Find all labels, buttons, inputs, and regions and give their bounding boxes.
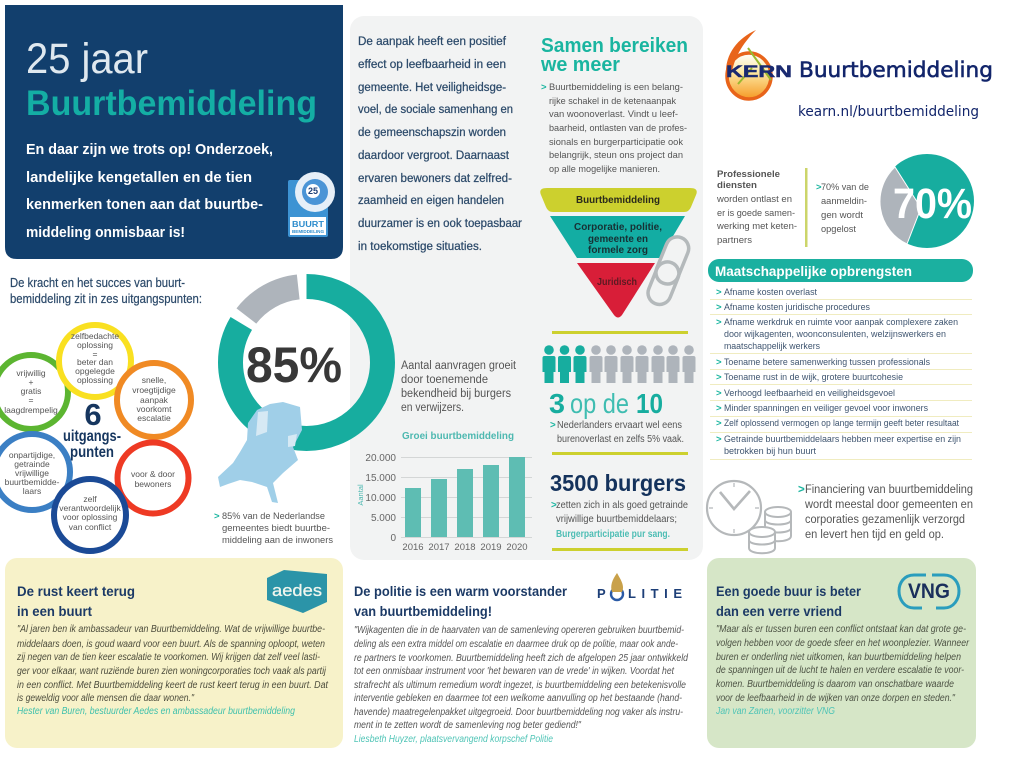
quote: "Al jaren ben ik ambassadeur van Buurtbemiddeling. Wat de vrijwillige buurtbe- [17,624,326,635]
circle: zelf verantwoordelijk [54,479,126,551]
panel: grey centre background [350,16,703,560]
stat: 3 op de 10: 10 [636,388,663,419]
text: positive effect: voel, de sociale samenhang en [358,102,513,116]
list: opbrengsten: maatschappelijk werkers [724,341,820,352]
label: 6 uitgangspunten: 6 [84,397,102,432]
circle: zelf verantwoordelijk: verantwoordelijk [59,503,121,513]
quote: tot een onmisbaar instrument voor 'het bewaren van de vrede' in wijken. Voordat het [354,666,675,677]
circle: zelf verantwoordelijk: zelf [83,494,97,504]
quote: Liesbeth Huyzer, plaatsvervangend korpschef Politie [354,734,554,745]
quote: voor de leefbaarheid in de wijken van onze dorpen en steden." [716,693,955,704]
text: 70% opgelost: aanmeldin- [821,196,867,207]
intro text: kenmerken tonen aan dat buurtbe- [26,196,263,213]
list: opbrengsten: > [716,372,722,383]
heading: in een buurt [17,604,92,619]
text: 70% opgelost: > [816,182,822,193]
circle: onpartijdige vrijwilligers: onpartijdige, [9,450,55,460]
chart: escalation funnel: Corporatie, politie, [574,221,662,233]
text: 85% van de gemeentes: middeling aan de inwoners [222,535,333,546]
quote: zij negen van de tien keer escalatie te voorkomen. Wij krijgen dat zelf veel lasti- [16,652,321,663]
list: opbrengsten: betrokken bij hun buurt [724,446,816,457]
logo: VNG [899,575,959,608]
chart: groei buurtbemiddeling [356,430,532,553]
text: financiering [798,484,973,541]
logo: KERN Buurtbemiddeling: Buurtbemiddeling [799,58,993,82]
chart: groei buurtbemiddeling: 10.000 [365,493,396,504]
text: 70% opgelost: opgelost [821,224,856,235]
chart: groei buurtbemiddeling: Groei buurtbemiddeling [402,430,514,442]
panel: VNG quote [707,558,976,748]
text: professionele diensten: diensten [717,180,757,191]
chart: escalation funnel: gemeente en [588,233,648,245]
list: opbrengsten: > [716,403,722,414]
stat: 3 op de 10 [549,388,663,419]
chart: groei buurtbemiddeling: 15.000 [365,473,396,484]
icon: anniversary badge: 25 [308,186,318,196]
text: professionele diensten: partners [717,235,752,246]
circle: onpartijdige vrijwilligers: getrainde [14,459,50,469]
heading: De rust keert terug [17,584,135,599]
heading: Een goede buur is beter [716,584,862,599]
text: professionele diensten: werking met keten- [716,221,797,232]
quote [16,624,329,717]
heading: Samen bereiken we meer: we meer [540,53,620,76]
circle: zelfbedachte oplossing [59,325,131,397]
heading: De politie is een warm voorstander [354,584,568,599]
quote: "Wijkagenten die in de haarvaten van de samenleving opereren gebruiken buurtbemid- [354,625,685,636]
quote: ger voor elkaar, want ruziënde buren zien woningcorporaties toch vaak als partij [17,666,327,677]
circle: vrijwillig [0,355,68,429]
text: financiering: Financiering van buurtbemiddeling [805,484,973,496]
chart: groei buurtbemiddeling: 5.000 [371,513,396,524]
text: professionele diensten: er is goede samen- [717,208,795,219]
heading: van buurtbemiddeling! [354,604,492,619]
text: positive effect: de gemeenschapszin worden [358,125,506,139]
circle: zelfbedachte oplossing: oplossing [77,340,113,350]
quote: buren er onderling niet uitkomen, kan buurtbemiddeling helpen [716,652,961,663]
icon: map of the Netherlands [218,402,302,503]
text: vrijwillige bemiddelaars: zetten zich in als goed getrainde [556,500,689,511]
heading: Samen bereiken we meer: Samen bereiken [541,34,688,57]
text: schakel in de ketenaanpak: belangrijk, steun ons project dan [549,150,683,161]
list: opbrengsten: > [716,418,722,429]
circle: zelfbedachte oplossing: oplossing [77,375,113,385]
icon: ten people [542,345,696,383]
text: positive effect: duurzamer is en ook toepasbaar [358,216,522,230]
quote: de spanningen uit de lucht te halen en verdere escalatie te voor- [716,665,965,676]
circle: onpartijdige vrijwilligers [0,434,70,510]
text: vrijwillige bemiddelaars: vrijwillige buurtbemiddelaars; [556,514,677,525]
logo: KERN Buurtbemiddeling: KERN [726,62,792,81]
circle: snelle aanpak: vroegtijdige [132,385,176,395]
circle: onpartijdige vrijwilligers: vrijwillige [15,468,49,478]
quote: komen. Buurtbemiddeling is daarom van onschatbare waarde [716,679,955,690]
icon: anniversary badge: BEMIDDELING [292,229,325,234]
chart: 70% pie: 70% [893,180,972,228]
quote [715,624,970,717]
text: 85% van de gemeentes: 85% van de Nederlandse [222,511,325,522]
label: 6 uitgangspunten: uitgangs- [63,428,121,445]
list: opbrengsten [716,287,961,457]
label: 6 uitgangspunten: punten [70,444,114,461]
circle: onpartijdige vrijwilligers: buurtbemidde- [5,477,60,487]
text: positive effect: zaamheid en eigen handelen [358,193,504,207]
circle: vrijwillig: laagdrempelig [4,405,58,415]
heading [17,584,135,619]
circle: onpartijdige vrijwilligers: laars [23,486,41,496]
text: schakel in de ketenaanpak: van woonoverlast. Vindt u leef- [549,109,678,120]
panel: maatschappelijke opbrengsten [708,259,973,460]
list: opbrengsten: > [716,357,722,368]
text: professionele diensten [716,169,797,246]
list: opbrengsten: > [716,302,722,313]
quote: interventie gebleken en daarmee tot een welkome aanvulling op het bestaande (hand- [354,693,683,704]
circle: snelle aanpak: escalatie [137,413,171,423]
icon: anniversary badge: BUURT [292,220,324,229]
text: 85% van de gemeentes [214,511,333,546]
chart: groei buurtbemiddeling: 20.000 [365,453,396,464]
heading: Buurtbemiddeling: Buurtbemiddeling [26,84,317,123]
text: kracht en succes: bemiddeling zit in zes uitgangspunten: [10,292,202,306]
text: aantal aanvragen: bekendheid bij burgers [401,388,511,400]
text: schakel in de ketenaanpak: sionals en burgerparticipatie ook [549,137,683,148]
stat: 3 op de 10: 3 [549,388,565,419]
list: opbrengsten: Toename betere samenwerking tussen professionals [724,357,930,368]
list: opbrengsten: Minder spanningen en veiliger gevoel voor inwoners [724,403,928,414]
circle: voor en door bewoners [118,442,188,514]
text: schakel in de ketenaanpak: baarheid, ontlasten van de profes- [549,123,687,134]
icon: anniversary badge [288,172,335,237]
quote: re partners te voorkomen. Buurtbemiddeling heeft zich de afgelopen 25 jaar ontwikkeld [354,653,689,664]
chart: escalation funnel [540,188,697,318]
list: opbrengsten: Afname kosten juridische procedures [724,302,870,313]
icon: chain [645,233,692,308]
diagram: six principles [0,325,191,551]
logo: Aedes [267,570,327,613]
circle: vrijwillig: vrijwillig [16,368,46,378]
text: positive effect: gemeente. Het veiligheidsge- [358,80,506,94]
text: positive effect: ervaren bewoners dat zelfred- [358,171,512,185]
text: schakel in de ketenaanpak: rijke schakel in de ketenaanpak [549,96,676,107]
text: schakel in de ketenaanpak: Buurtbemiddeling is een belang- [549,82,683,93]
logo: KERN Buurtbemiddeling [726,30,993,120]
icon: coins [749,507,791,553]
text: schakel in de ketenaanpak: > [541,82,547,93]
heading [716,584,862,619]
text: burenoverlast [550,420,684,445]
text: burenoverlast: burenoverlast en zelfs 5% vaak. [557,434,684,445]
circle: zelfbedachte oplossing: opgelegde [75,366,115,376]
circle: zelf verantwoordelijk: voor oplossing [63,512,118,522]
chart: groei buurtbemiddeling: 2016 [402,542,424,553]
intro text [26,141,273,241]
stat: 3 op de 10: op de [570,388,629,419]
text: 70% opgelost: gen wordt [821,210,863,221]
circle: zelfbedachte oplossing: = [93,349,98,359]
text: financiering: > [798,484,805,496]
chart: escalation funnel: formele zorg [588,244,648,256]
quote: is geweldig voor alle mensen die daar wonen." [17,693,194,704]
chart: 85% donut: 85% [246,337,342,393]
logo: Aedes: aedes [272,581,322,600]
text: vrijwillige bemiddelaars: > [551,500,557,511]
heading [354,584,568,619]
circle: snelle aanpak: snelle, [142,375,166,385]
logo: Politie: P [597,586,606,601]
stat: 3500 burgers: 3500 burgers [550,470,686,496]
circle: snelle aanpak [117,363,191,437]
list: opbrengsten: Afname werkdruk en ruimte voor aanpak complexere zaken [724,317,958,328]
panel: Politie quote [354,573,689,745]
chart: groei buurtbemiddeling: 2019 [480,542,502,553]
list: opbrengsten: > [716,317,722,328]
chart: groei buurtbemiddeling: 2017 [428,542,450,553]
list: opbrengsten: > [716,388,722,399]
text: professionele diensten: worden ontlast en [716,194,792,205]
chart: groei buurtbemiddeling: 2018 [454,542,476,553]
circle: voor en door bewoners: voor & door [131,469,175,479]
panel: title [5,5,343,259]
text: positive effect: De aanpak heeft een positief [358,34,507,48]
text: burenoverlast: > [550,420,556,431]
circle: vrijwillig: + [29,377,34,387]
quote: Jan van Zanen, voorzitter VNG [715,706,835,717]
text: 70% opgelost: 70% van de [821,182,869,193]
icon: clock [707,481,761,535]
text: schakel in de ketenaanpak [541,82,687,175]
text: kracht en succes [10,276,202,306]
circle: snelle aanpak: aanpak [140,395,169,405]
list: opbrengsten: door wijkagenten, woonconsulenten, welzijnswerkers en [724,329,946,340]
text: 85% van de gemeentes: gemeentes biedt buurtbe- [222,523,330,534]
list: opbrengsten: Afname kosten overlast [724,287,817,298]
quote: ment in te zetten wordt de samenleving nog beter gediend!" [354,720,581,731]
text: schakel in de ketenaanpak: op alle mogelijke manieren. [549,164,660,175]
text: kracht en succes: De kracht en het succes van buurt- [10,276,185,290]
quote [354,625,689,745]
logo: Politie [597,573,682,601]
circle: zelfbedachte oplossing: beter dan [77,357,113,367]
chart: groei buurtbemiddeling: 2020 [506,542,528,553]
text: vrijwillige bemiddelaars [551,500,689,540]
circle: zelf verantwoordelijk: van conflict [69,522,112,532]
text: positive effect: in toekomstige situaties. [358,239,482,253]
text: positive effect: daardoor vergroot. Daarnaast [358,148,510,162]
text: vrijwillige bemiddelaars: Burgerparticipatie pur sang. [556,529,670,540]
quote: "Maar als er tussen buren een conflict ontstaat kan dat grote ge- [716,624,967,635]
text: 85% van de gemeentes: > [214,511,220,522]
chart: escalation funnel: Buurtbemiddeling [576,195,660,206]
circle: voor en door bewoners: bewoners [135,479,171,489]
text: financiering: wordt meestal door gemeenten en [804,499,973,511]
circle: vrijwillig: gratis [21,386,41,396]
chart: groei buurtbemiddeling: 0 [390,533,396,544]
chart: 70% pie [880,154,974,248]
panel: maatschappelijke opbrengsten: Maatschappelijke opbrengsten [715,263,912,279]
quote: havende) maatregelenpakket uitgegroeid. Door buurtbemiddeling nog vaker als instru- [354,707,684,718]
heading: dan een verre vriend [716,604,842,619]
logo: Politie: LITIE [628,586,682,601]
quote: in een conflict. Met Buurtbemiddeling keert de rust keert terug in een buurt. Dat [17,680,329,691]
text: 70% opgelost [816,182,869,235]
text: aantal aanvragen: Aantal aanvragen groeit [401,360,517,372]
heading: Samen bereiken we meer [540,34,688,76]
list: opbrengsten: Toename rust in de wijk, grotere buurtcohesie [724,372,903,383]
heading: 25 jaar: 25 jaar [26,35,148,83]
text: positive effect: effect op leefbaarheid in een [358,57,506,71]
list: opbrengsten: > [716,287,722,298]
quote: volgen hebben voor de goede sfeer en het woonplezier. Wanneer [716,638,970,649]
label: 6 uitgangspunten [63,397,121,461]
logo: VNG: VNG [908,580,950,603]
circle: vrijwillig: = [29,395,34,405]
intro text: middeling onmisbaar is! [26,224,185,241]
list: opbrengsten: > [716,434,722,445]
quote: middelaars doen, is goud waard voor een buurt. Als de spanning oploopt, weten [17,639,325,650]
list: opbrengsten: Getrainde buurtbemiddelaars hebben meer expertise en zijn [724,434,961,445]
panel: Aedes quote [5,558,343,748]
list: opbrengsten: Verhoogd leefbaarheid en veiligheidsgevoel [724,388,895,399]
chart: escalation funnel: Juridisch [597,277,637,288]
text: aantal aanvragen: door toenemende [401,374,488,386]
chart: groei buurtbemiddeling: Aantal [356,484,365,506]
quote: Hester van Buren, bestuurder Aedes en ambassadeur buurtbemiddeling [17,706,296,717]
text: financiering: corporaties gezamenlijk verzorgd [805,514,965,526]
quote: deling als een extra middel om escalatie en daarmee druk op de politie, maar ook ande- [354,639,679,650]
text: aantal aanvragen [401,360,517,414]
text: burenoverlast: Nederlanders ervaart wel eens [557,420,682,431]
circle: snelle aanpak: voorkomt [137,404,172,414]
list: opbrengsten: Zelf oplossend vermogen op lange termijn geeft beter resultaat [724,418,959,429]
text: aantal aanvragen: en verwijzers. [401,402,464,414]
text: financiering: en levert hen tijd en geld op. [805,529,944,541]
text: professionele diensten: Professionele [717,169,780,180]
text: positive effect [358,34,522,253]
intro text: En daar zijn we trots op! Onderzoek, [26,141,273,158]
quote: strafrecht als ultimum remedium wordt ingezet, is buurtbemiddeling een betekenisvolle [354,680,687,691]
circle: zelfbedachte oplossing: zelfbedachte [71,331,119,341]
link: kearn.nl/buurtbemiddeling [798,104,979,120]
chart: 85% donut [230,286,382,438]
intro text: landelijke kengetallen en de tien [26,169,252,186]
